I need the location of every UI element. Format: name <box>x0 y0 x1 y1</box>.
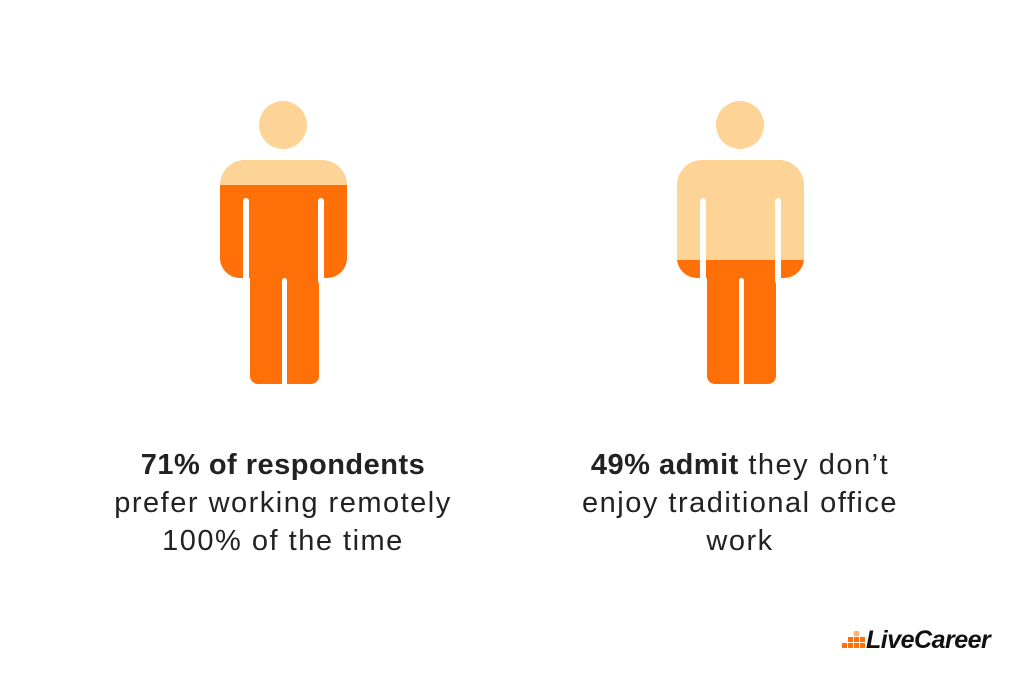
figures <box>220 101 804 384</box>
caption: 71% <box>114 449 452 557</box>
icon: logo bars <box>842 631 865 648</box>
caption: 71%: prefer working remotely <box>114 487 452 519</box>
logo: LiveCareer <box>866 626 990 654</box>
caption: 71%: 100% of the time <box>162 525 404 557</box>
caption: 71%: 71% of respondents <box>141 449 425 481</box>
figure: 71% <box>220 101 347 388</box>
figure: 49% <box>677 101 804 388</box>
caption: 49%: work <box>706 525 774 557</box>
caption: 49%: 49% admit they don’t <box>591 449 889 481</box>
caption: 49% <box>582 449 898 557</box>
caption: 49%: enjoy traditional office <box>582 487 898 519</box>
